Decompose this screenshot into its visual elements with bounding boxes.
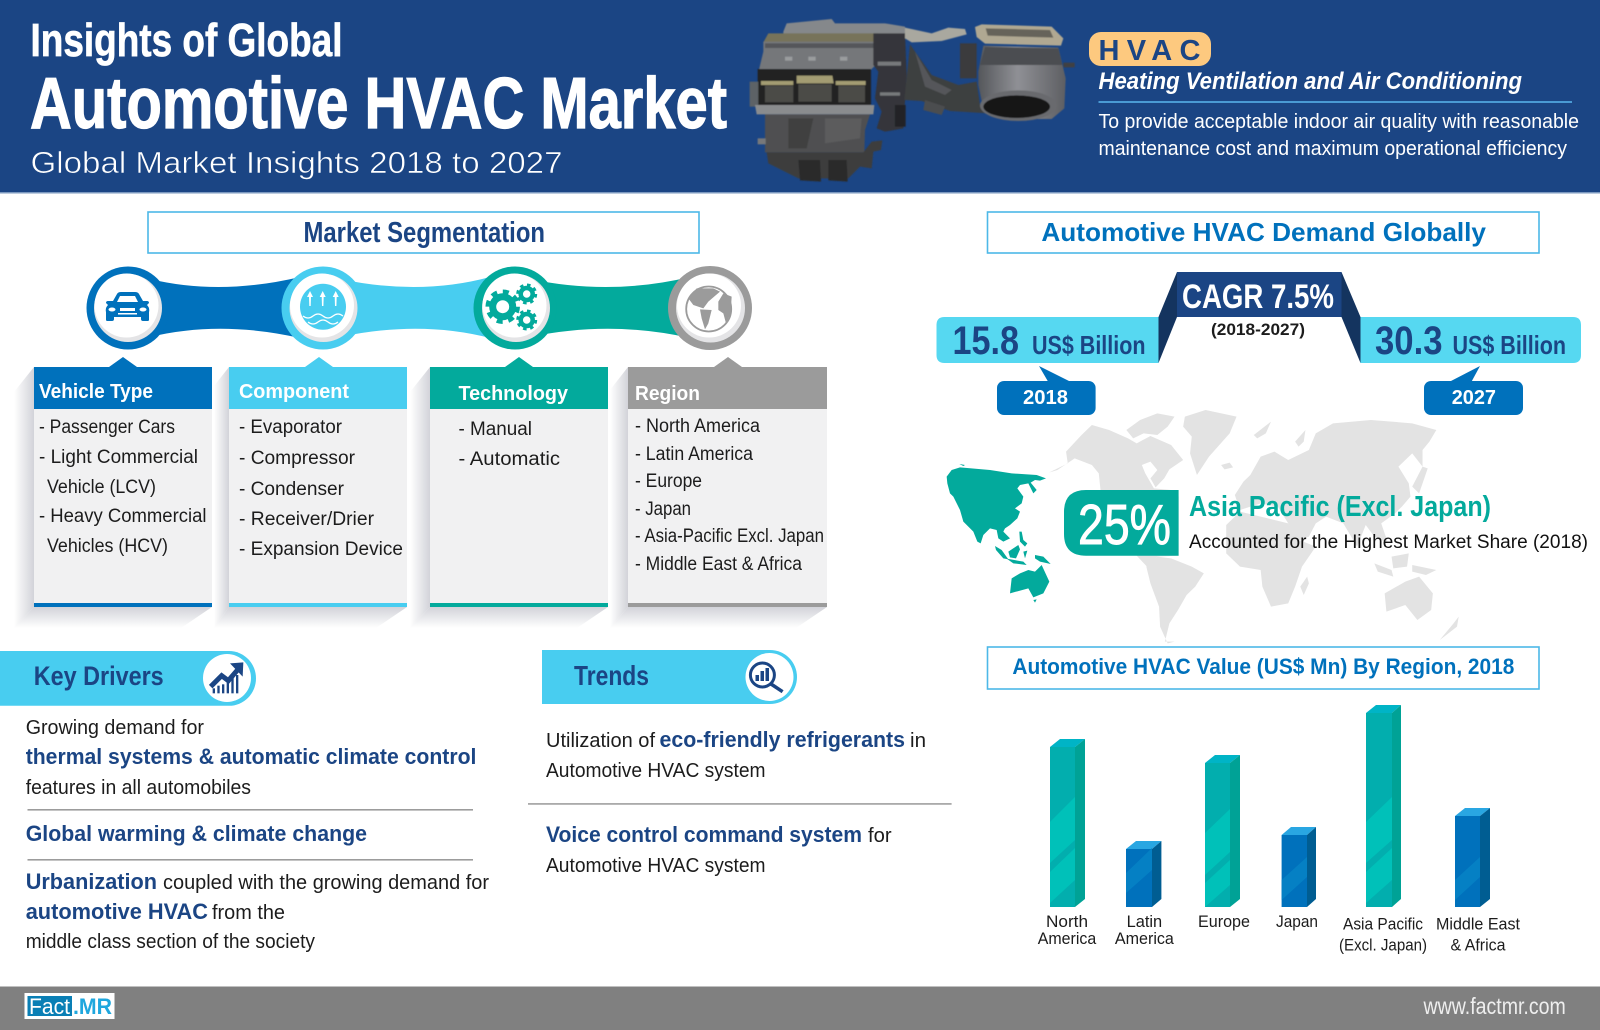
map: asia pacific highlight [947, 464, 1051, 603]
CAGR ribbon [1158, 272, 1360, 363]
text: key drivers list: automotive HVAC [26, 899, 208, 924]
panel: vehicle type: - Passenger Cars [39, 417, 175, 438]
panel: technology: Technology [458, 383, 569, 405]
logo: .MR [73, 994, 112, 1019]
text: key drivers list: from the [212, 902, 285, 924]
panel: region: - Middle East & Africa [635, 554, 802, 575]
text: key drivers list: Growing demand for [26, 717, 204, 739]
CAGR ribbon: (2018-2027) [1211, 320, 1305, 339]
text: key drivers list: Urbanization [26, 869, 157, 894]
image: HVAC unit [750, 19, 1075, 182]
bar: Latin America [1126, 841, 1161, 907]
world map [1049, 410, 1459, 643]
footer: www.factmr.com [1423, 993, 1566, 1019]
value bar: 2027: 30.3 [1375, 319, 1442, 363]
HVAC definition: To provide acceptable indoor air quality with reasonable [1098, 110, 1579, 133]
panel: region [610, 357, 827, 628]
bar: North America [1050, 739, 1085, 907]
HVAC badge: HVAC [1098, 35, 1201, 67]
connector ribbon [150, 277, 690, 338]
heading: market segmentation [148, 212, 699, 253]
bar labels: Middle East [1436, 914, 1520, 934]
value bar: 2027 [1360, 317, 1581, 363]
bar labels [1038, 912, 1520, 955]
bar labels: (Excl. Japan) [1339, 936, 1427, 955]
title: Insights of Global [30, 14, 342, 66]
panel: vehicle type [14, 357, 212, 628]
text: key drivers list: features in all automobiles [26, 777, 251, 799]
heading: demand globally: Automotive HVAC Demand Globally [1041, 217, 1487, 247]
panel: vehicle type: - Light Commercial [39, 447, 198, 468]
icon: technology gears [474, 266, 556, 350]
text: trends list: Automotive HVAC system [546, 855, 766, 877]
text: trends list: in [910, 730, 926, 752]
icon: vehicle [86, 266, 170, 350]
panel: component: - Compressor [239, 448, 356, 469]
bar: Asia Pacific [1366, 705, 1401, 907]
HVAC definition: maintenance cost and maximum operational efficiency [1098, 137, 1568, 160]
title [30, 14, 727, 180]
panel: region: - North America [635, 416, 760, 437]
bar labels: Europe [1198, 912, 1250, 931]
text: key drivers list: Global warming & climate change [26, 821, 367, 846]
heading: market segmentation: Market Segmentation [304, 217, 545, 249]
text: trends list: Utilization of [546, 730, 655, 752]
text: trends list: eco-friendly refrigerants [660, 727, 905, 752]
value bar: 2018 [936, 317, 1158, 363]
panel: component: - Evaporator [239, 417, 343, 438]
CAGR ribbon: CAGR 7.5% [1182, 278, 1334, 316]
heading: trends: Trends [574, 660, 649, 691]
bar labels: Japan [1276, 912, 1318, 931]
bar labels: North [1046, 912, 1088, 931]
panel: vehicle type: Vehicles (HCV) [47, 536, 168, 557]
callout: 25 percent: 25% [1078, 493, 1171, 557]
bar labels: & Africa [1450, 936, 1506, 955]
bar labels: America [1038, 929, 1097, 948]
text: asia pacific share: Accounted for the Highest Market Share (2018) [1189, 532, 1588, 553]
panel: region: - Japan [635, 499, 691, 520]
panel: region: Region [635, 383, 700, 405]
callout: 2027: 2027 [1452, 387, 1496, 409]
text: key drivers list: coupled with the growing demand for [163, 872, 489, 894]
heading: demand globally [988, 212, 1539, 253]
bar labels: Asia Pacific [1343, 914, 1423, 934]
logo: Fact [29, 994, 70, 1019]
text: key drivers list: thermal systems & automatic climate control [26, 744, 476, 769]
heading: value by region: Automotive HVAC Value (US$ Mn) By Region, 2018 [1012, 654, 1514, 679]
bar labels: America [1115, 929, 1174, 948]
text: key drivers list [26, 717, 489, 953]
panel: vehicle type: - Heavy Commercial [39, 506, 206, 527]
heading: key drivers [0, 651, 256, 706]
text: key drivers list: middle class section of the society [26, 931, 315, 953]
icon: region globe [668, 266, 752, 350]
heading: trends [542, 650, 797, 704]
panel: vehicle type: Vehicle (LCV) [47, 477, 156, 498]
panel: component: Component [239, 381, 349, 403]
footer [0, 986, 1600, 1030]
bar: Europe [1205, 755, 1240, 907]
icon: magnifier [750, 663, 783, 692]
text: asia pacific share: Asia Pacific (Excl. Japan) [1189, 491, 1491, 523]
value bar: 2018: US$ Billion [1032, 330, 1146, 360]
panel: vehicle type: Vehicle Type [39, 381, 153, 403]
panel: technology [410, 357, 608, 628]
panel: component [214, 357, 407, 628]
heading: key drivers: Key Drivers [34, 661, 164, 691]
icon: component [282, 266, 364, 350]
bar: Japan [1282, 827, 1316, 907]
panel: component: - Receiver/Drier [239, 509, 375, 530]
bar: Middle East and Africa [1455, 808, 1490, 907]
panel: region: - Latin America [635, 444, 753, 465]
panel: component: - Expansion Device [239, 539, 403, 560]
panel: component: - Condenser [239, 479, 345, 500]
value bar: 2027: US$ Billion [1452, 330, 1566, 360]
HVAC definition: Heating Ventilation and Air Conditioning [1098, 68, 1522, 95]
panel: region: - Europe [635, 471, 702, 492]
title: Automotive HVAC Market [30, 64, 727, 144]
panel: region: - Asia-Pacific Excl. Japan [635, 526, 824, 547]
text: asia pacific share [1189, 491, 1588, 553]
heading: value by region [988, 647, 1539, 689]
callout: 2018 [997, 366, 1096, 415]
value bar: 2018: 15.8 [952, 319, 1019, 363]
logo [24, 993, 114, 1019]
callout: 2018: 2018 [1023, 387, 1068, 409]
HVAC definition [1098, 68, 1579, 160]
panel: technology: - Automatic [458, 449, 560, 470]
text: trends list: Automotive HVAC system [546, 760, 766, 782]
panel: technology: - Manual [458, 419, 532, 440]
header banner [0, 0, 1600, 194]
text: trends list: Voice control command system [546, 822, 862, 847]
icon: growth chart [211, 662, 243, 693]
text: trends list [528, 727, 952, 877]
bar labels: Latin [1127, 912, 1162, 931]
bar chart [1038, 705, 1520, 955]
title: Global Market Insights 2018 to 2027 [30, 145, 562, 180]
callout: 2027 [1424, 366, 1523, 415]
text: trends list: for [868, 825, 892, 847]
